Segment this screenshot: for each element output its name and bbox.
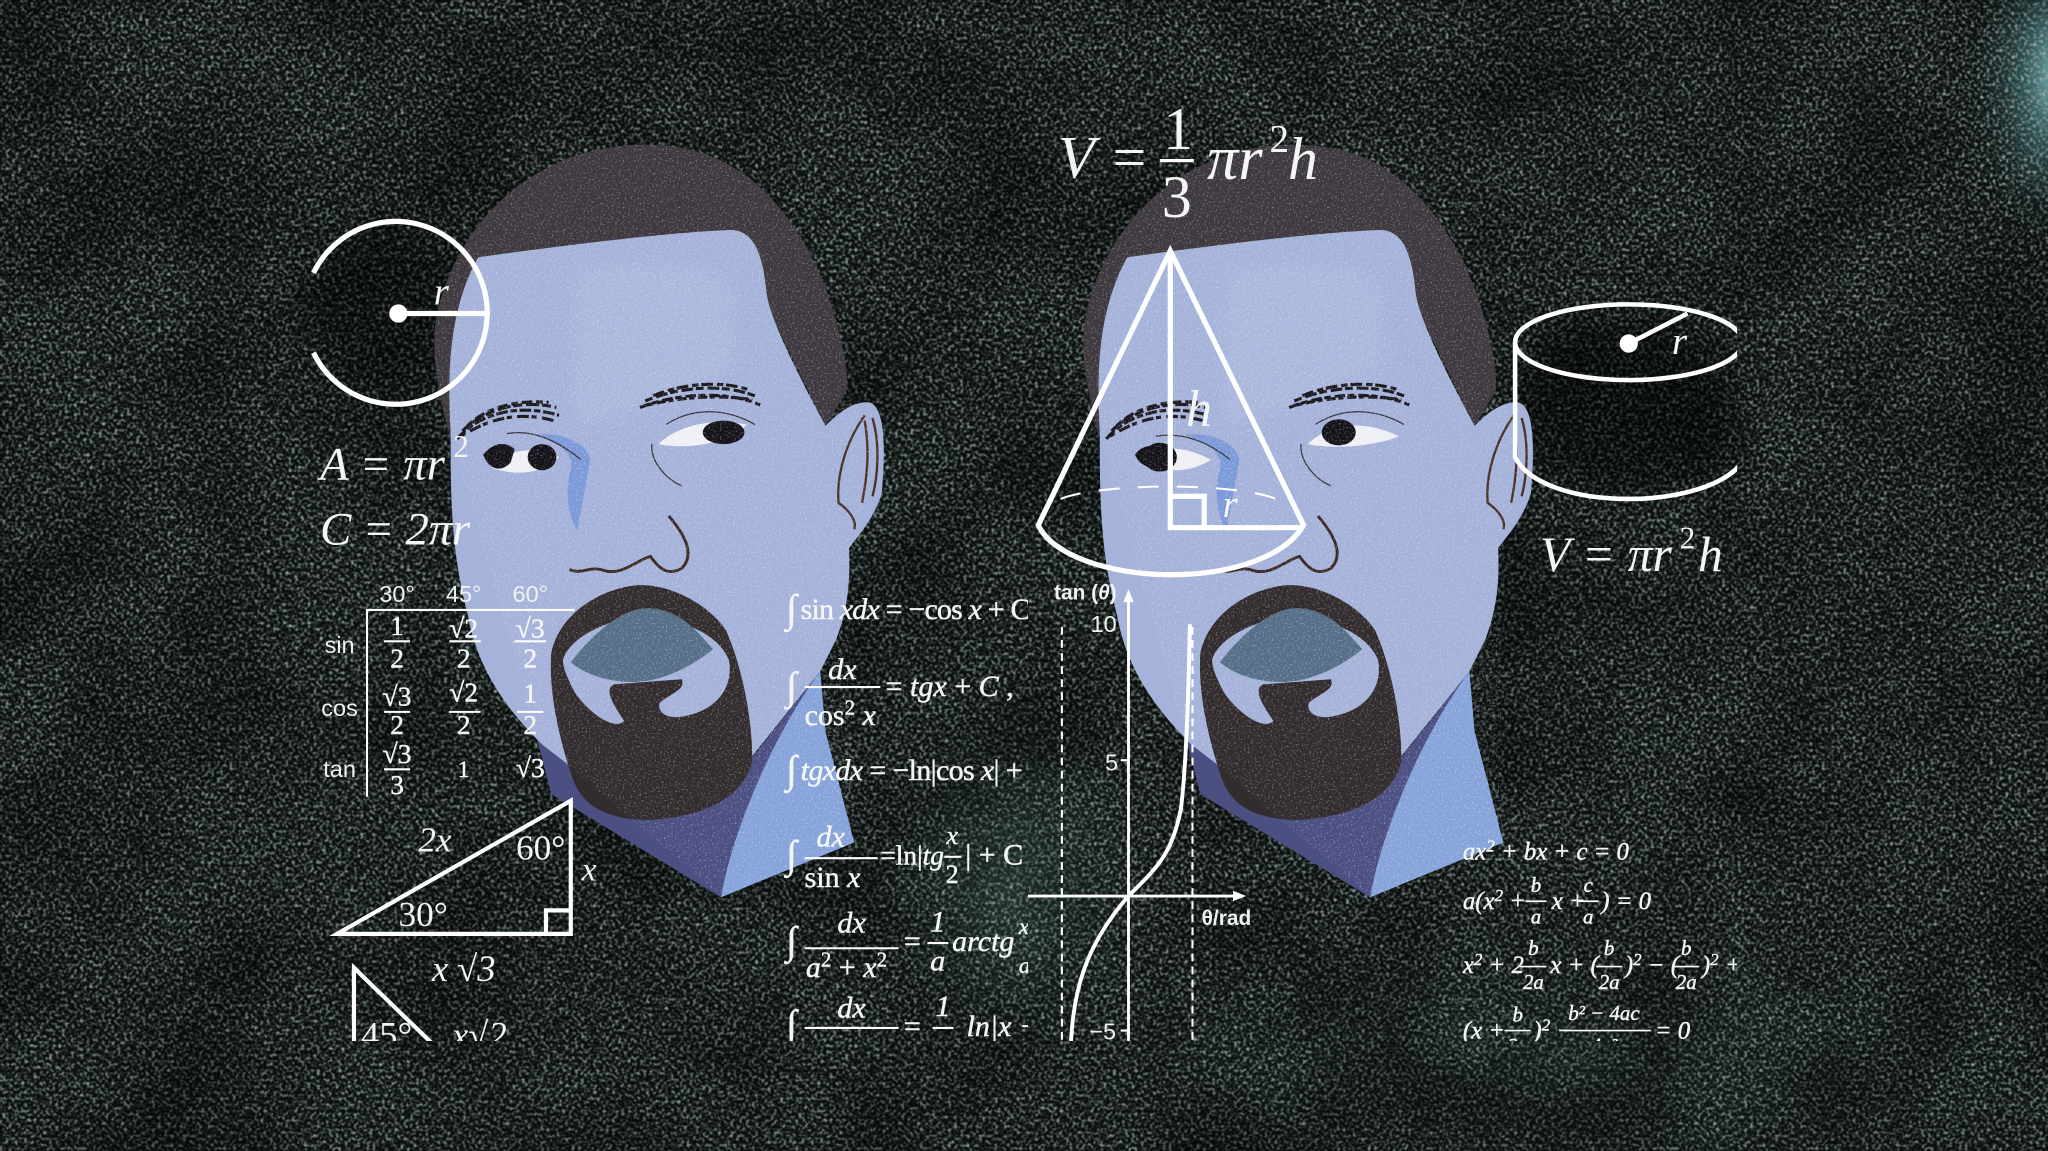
integral formulas: x <box>862 951 877 984</box>
cone volume formula: πr <box>1207 123 1263 193</box>
eyebrows <box>1106 384 1409 439</box>
quadratic derivation: 2 <box>1474 950 1483 969</box>
hair <box>1083 145 1496 438</box>
integral formulas <box>784 588 1039 1048</box>
trigonometry table: 2 <box>523 643 537 673</box>
quadratic derivation: b² − 4ac <box>1568 1001 1640 1025</box>
cylinder volume formula: 2 <box>1680 521 1695 556</box>
trigonometry table: 2 <box>457 710 471 740</box>
quadratic derivation: + 2 <box>1482 952 1524 979</box>
quadratic derivation: ) <box>1702 952 1710 979</box>
quadratic derivation: + bx + c = 0 <box>1495 838 1630 865</box>
tangent graph <box>1028 582 1251 1045</box>
trigonometry table: 3 <box>390 770 404 800</box>
quadratic derivation: 2a <box>1676 970 1697 994</box>
forehead highlight <box>1224 263 1387 431</box>
quadratic derivation: ) = 0 <box>1599 888 1652 915</box>
quadratic derivation: + <box>1503 888 1526 915</box>
trigonometry table: 1 <box>523 679 537 709</box>
quadratic derivation: − ( <box>1642 952 1681 979</box>
trigonometry table <box>321 581 575 800</box>
quadratic derivation: c <box>1584 873 1594 897</box>
integral formulas: sin xdx = −cos x + C <box>801 593 1031 626</box>
quadratic derivation: ax <box>1463 838 1486 865</box>
integral formulas: x <box>945 821 958 850</box>
circle diagram <box>313 221 490 404</box>
45 degree triangle: x√2 <box>451 1015 507 1056</box>
cone diagram: h <box>1186 380 1212 438</box>
quadratic derivation: x + ( <box>1549 952 1601 979</box>
30-60 triangle: 2x <box>418 821 452 860</box>
circle formulas: C = 2πr <box>320 504 471 556</box>
quadratic derivation: x + <box>1551 888 1586 915</box>
integral formulas: ∫ <box>784 919 799 964</box>
trigonometry table: 2 <box>390 710 404 740</box>
integral formulas: dx <box>837 907 866 940</box>
integral formulas: = <box>904 1010 921 1043</box>
left eye <box>1135 435 1230 472</box>
tangent graph: tan (θ) <box>1054 582 1117 605</box>
collar <box>537 671 820 897</box>
integral formulas: 2 <box>845 695 855 719</box>
trigonometry table: √3 <box>383 739 411 769</box>
circle formulas <box>317 429 471 556</box>
trigonometry table: 2 <box>457 643 471 673</box>
cone diagram: r <box>1223 483 1239 526</box>
integral formulas: dx <box>837 991 866 1024</box>
cylinder volume formula: h <box>1698 527 1723 582</box>
ear lines <box>838 415 877 529</box>
integral formulas: arctg <box>952 925 1014 958</box>
quadratic derivation: x <box>1463 952 1474 979</box>
30-60 triangle: 60° <box>516 828 565 867</box>
shirt <box>721 671 854 897</box>
integral formulas: a <box>1019 953 1031 979</box>
lips <box>1220 608 1362 682</box>
circle formulas: 2 <box>453 429 469 464</box>
30-60 triangle: 30° <box>399 895 448 934</box>
integral formulas: 2 <box>946 860 959 889</box>
trigonometry table: tan <box>323 756 356 782</box>
nose <box>569 516 688 572</box>
cylinder volume formula <box>1540 521 1723 582</box>
skin grain <box>434 144 883 896</box>
trigonometry table: 2 <box>523 710 537 740</box>
trigonometry table: 1 <box>458 757 470 783</box>
quadratic derivation: b <box>1604 936 1614 960</box>
chin patch <box>1212 618 1379 724</box>
cone volume formula: V = <box>1058 124 1149 191</box>
tear shadow <box>1185 434 1240 530</box>
quadratic derivation: a <box>1531 904 1541 928</box>
face <box>449 230 884 810</box>
integral formulas: cos <box>805 699 845 732</box>
30-60 triangle <box>337 801 597 989</box>
quadratic derivation: (x + <box>1463 1017 1505 1044</box>
cone volume formula: 3 <box>1162 163 1192 230</box>
trigonometry table: √2 <box>449 613 478 643</box>
cone volume formula <box>1058 95 1318 230</box>
integral formulas: dx <box>828 653 857 686</box>
integral formulas: ∫ <box>784 833 799 878</box>
quadratic derivation: 2 <box>1495 886 1504 905</box>
cylinder volume formula: V = πr <box>1540 527 1672 582</box>
trigonometry table: √3 <box>516 753 545 783</box>
cylinder diagram: r <box>1672 320 1688 363</box>
right eye <box>1301 412 1404 486</box>
nose <box>1219 516 1337 572</box>
integral formulas: x <box>1018 914 1030 940</box>
integral formulas: 1 <box>930 905 945 938</box>
trigonometry table: 60° <box>513 581 548 607</box>
quadratic derivation: 4a² <box>1590 1034 1618 1058</box>
trigonometry table: √2 <box>449 677 478 707</box>
quadratic derivation <box>1462 840 1738 1041</box>
30-60 triangle: x <box>581 851 597 888</box>
circle formulas: A = πr <box>317 438 446 490</box>
trigonometry table: sin <box>325 632 355 658</box>
quadratic derivation: 2 <box>1633 950 1642 969</box>
integral formulas: ln|x − <box>967 1010 1039 1043</box>
right eye <box>652 412 755 486</box>
cone volume formula: 2 <box>1270 118 1289 161</box>
integral formulas: ∫ <box>784 748 799 793</box>
integral formulas: dx <box>817 820 846 853</box>
forehead highlight <box>575 263 738 431</box>
quadratic derivation: ) <box>1625 952 1633 979</box>
tangent graph: 5 <box>1105 750 1118 776</box>
45 degree triangle <box>354 968 507 1056</box>
beard <box>1200 585 1401 820</box>
trigonometry table: 2 <box>390 643 404 673</box>
portrait: left head <box>434 144 884 898</box>
collar <box>1186 671 1469 897</box>
tangent graph: 10 <box>1091 611 1117 637</box>
quadratic derivation: = 0 <box>1655 1017 1691 1044</box>
quadratic derivation: 2 <box>1542 1016 1551 1035</box>
cone volume formula: h <box>1288 125 1318 192</box>
quadratic derivation: 2 <box>1710 950 1719 969</box>
quadratic derivation: b <box>1528 936 1539 960</box>
integral formulas: | + C <box>965 839 1023 872</box>
ear lines <box>1487 415 1527 529</box>
trigonometry table: cos <box>321 695 358 721</box>
integral formulas: 2 <box>877 948 887 972</box>
hair <box>434 145 847 438</box>
integral formulas: a <box>806 951 821 984</box>
45 degree triangle: 45° <box>361 1015 412 1056</box>
integral formulas: a <box>930 944 945 977</box>
lips <box>571 608 713 682</box>
quadratic derivation: ) <box>1533 1017 1542 1044</box>
tear shadow <box>536 434 590 530</box>
30-60 triangle: x √3 <box>431 948 496 989</box>
integral formulas: = tgx + C , <box>886 670 1014 703</box>
integral formulas: ∫ <box>784 1003 799 1048</box>
quadratic derivation: + <box>1719 952 1742 979</box>
tangent graph: −5 <box>1089 1019 1116 1045</box>
circle diagram: r <box>434 270 450 313</box>
quadratic derivation: 2 <box>1486 837 1495 856</box>
quadratic derivation: a <box>1583 904 1593 928</box>
trigonometry table: 45° <box>446 581 481 607</box>
quadratic derivation: 2a <box>1599 970 1620 994</box>
quadratic derivation: b <box>1512 1002 1523 1026</box>
integral formulas: x <box>855 699 877 732</box>
cylinder diagram <box>1515 304 1742 499</box>
trigonometry table: √3 <box>516 613 545 643</box>
integral formulas: + <box>831 951 863 984</box>
quadratic derivation: − <box>1550 1017 1573 1044</box>
eyebrows <box>457 384 760 439</box>
quadratic derivation: 2a <box>1523 970 1544 994</box>
cone volume formula: 1 <box>1163 95 1193 162</box>
trigonometry table: √3 <box>383 681 411 711</box>
integral formulas: 2 <box>821 948 831 972</box>
beard <box>551 585 752 820</box>
cone diagram <box>1038 251 1304 575</box>
trigonometry table: 30° <box>379 581 415 607</box>
integral formulas: 1 <box>936 990 951 1023</box>
quadratic derivation: b <box>1531 873 1541 897</box>
portrait: right head <box>1084 144 1533 898</box>
skin grain <box>1084 144 1532 896</box>
trigonometry table: 1 <box>390 611 404 641</box>
face <box>1098 230 1533 810</box>
integral formulas: tgxdx = −ln|cos x| + <box>801 754 1023 787</box>
quadratic derivation: b <box>1681 936 1691 960</box>
integral formulas: ∫ <box>784 665 799 710</box>
quadratic derivation: a(x <box>1463 888 1495 915</box>
integral formulas: sin x <box>805 861 861 894</box>
integral formulas: ∫ <box>784 588 799 633</box>
chin patch <box>563 618 730 724</box>
quadratic derivation: 2a <box>1507 1034 1528 1058</box>
integral formulas: =ln|tg <box>880 841 944 871</box>
shirt <box>1370 671 1503 897</box>
tangent graph: θ/rad <box>1202 907 1251 930</box>
left eye <box>483 433 581 473</box>
integral formulas: = <box>904 925 921 958</box>
